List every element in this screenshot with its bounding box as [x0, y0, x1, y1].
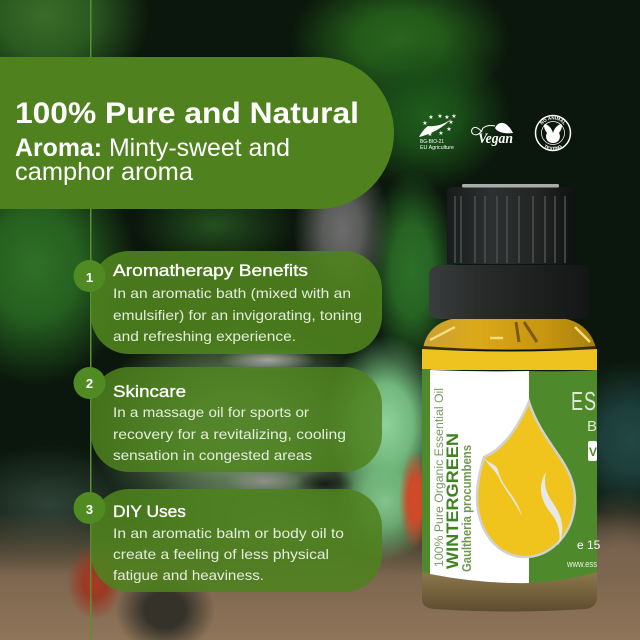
label: green left strip — [422, 369, 431, 574]
label: brand text: E — [571, 386, 583, 416]
icon: step number 3: 3 — [86, 502, 93, 517]
label: brand text — [566, 386, 601, 570]
bottle — [422, 184, 601, 612]
panel: DIY uses — [74, 489, 382, 592]
icon: oil drop — [477, 402, 575, 557]
icon: no animal testing badge: NO ANIMAL — [540, 116, 565, 125]
text: aromatherapy description: emulsifier) for an invigorating, toning — [113, 307, 362, 323]
text: DIY description — [113, 525, 344, 583]
icon: vegan logo — [472, 123, 513, 147]
label: vertical tagline: 100% Pure Organic Essential Oil — [434, 388, 446, 567]
icon: EU organic leaf: ★ — [438, 130, 444, 137]
panel: title banner — [0, 57, 394, 209]
icon: vegan logo: Vegan — [478, 131, 513, 147]
text: skincare description — [113, 404, 346, 463]
panel: skincare — [74, 367, 382, 472]
vertical timeline line — [90, 0, 92, 640]
icon: step number 1 — [74, 260, 106, 292]
text: aroma description — [15, 134, 290, 186]
label: brand text: V — [589, 445, 597, 459]
icon: EU organic leaf: ★ — [451, 113, 457, 120]
icon: EU organic leaf: ★ — [448, 119, 454, 126]
text: DIY description: In an aromatic balm or body oil to — [113, 525, 344, 541]
label: brand text: S — [584, 386, 596, 416]
label: green right panel — [529, 370, 597, 583]
icon: EU organic leaf: ★ — [428, 114, 434, 121]
text: skincare description: sensation in congested areas — [113, 447, 312, 463]
text: aromatherapy description: In an aromatic bath (mixed with an — [113, 285, 351, 301]
icon: EU organic leaf: ★ — [444, 114, 450, 121]
icon: EU organic leaf: ★ — [422, 120, 428, 127]
bottle base — [422, 570, 597, 612]
bottle collar — [429, 265, 590, 319]
icon: step number 1: 1 — [86, 270, 93, 285]
text: skincare description: recovery for a revitalizing, cooling — [113, 426, 346, 442]
icon: EU organic leaf: EU Agriculture — [420, 145, 454, 151]
text: DIY description: create a feeling of less physical — [113, 546, 329, 562]
text: aroma description: camphor aroma — [15, 158, 193, 186]
icon: EU organic leaf: BG-BIO-21 — [420, 139, 444, 145]
icon: step number 2: 2 — [86, 376, 93, 391]
bottle cap — [447, 187, 575, 264]
icon: EU organic leaf: ★ — [446, 126, 452, 133]
text: aroma description: Aroma: Minty-sweet and — [15, 134, 290, 162]
icon: EU organic leaf — [419, 113, 457, 151]
panel: aromatherapy benefits — [74, 251, 382, 354]
cap ridges — [455, 196, 565, 263]
label: botanical name: Gaultheria procumbens — [460, 445, 474, 572]
label: white panel — [430, 370, 529, 583]
icon: no animal testing badge — [534, 114, 572, 152]
icon: no animal testing badge: TESTING — [544, 144, 562, 150]
heading: Aromatherapy Benefits: Aromatherapy Benefits — [113, 261, 308, 280]
icon: step number 3 — [74, 492, 106, 524]
icon: EU organic leaf: ★ — [427, 131, 433, 138]
text: aromatherapy description — [113, 285, 362, 344]
heading: 100% Pure and Natural: 100% Pure and Natural — [15, 97, 359, 130]
bottle shoulder glass — [423, 319, 596, 350]
label: brand text: e 15 — [577, 538, 601, 552]
oil band — [422, 349, 597, 370]
label: product name: WINTERGREEN — [443, 433, 462, 569]
cap top highlight — [462, 184, 559, 188]
text: skincare description: In a massage oil for sports or — [113, 404, 309, 420]
icon: step number 2 — [74, 367, 106, 399]
heading: Skincare: Skincare — [113, 382, 186, 401]
text: DIY description: fatigue and heaviness. — [113, 567, 264, 583]
label: brand text: www.ess — [566, 559, 597, 570]
heading: DIY Uses: DIY Uses — [113, 502, 186, 521]
icon: EU organic leaf: ★ — [437, 113, 443, 120]
text: aromatherapy description: and refreshing experience. — [113, 328, 296, 344]
label: brand text: B — [587, 418, 597, 435]
